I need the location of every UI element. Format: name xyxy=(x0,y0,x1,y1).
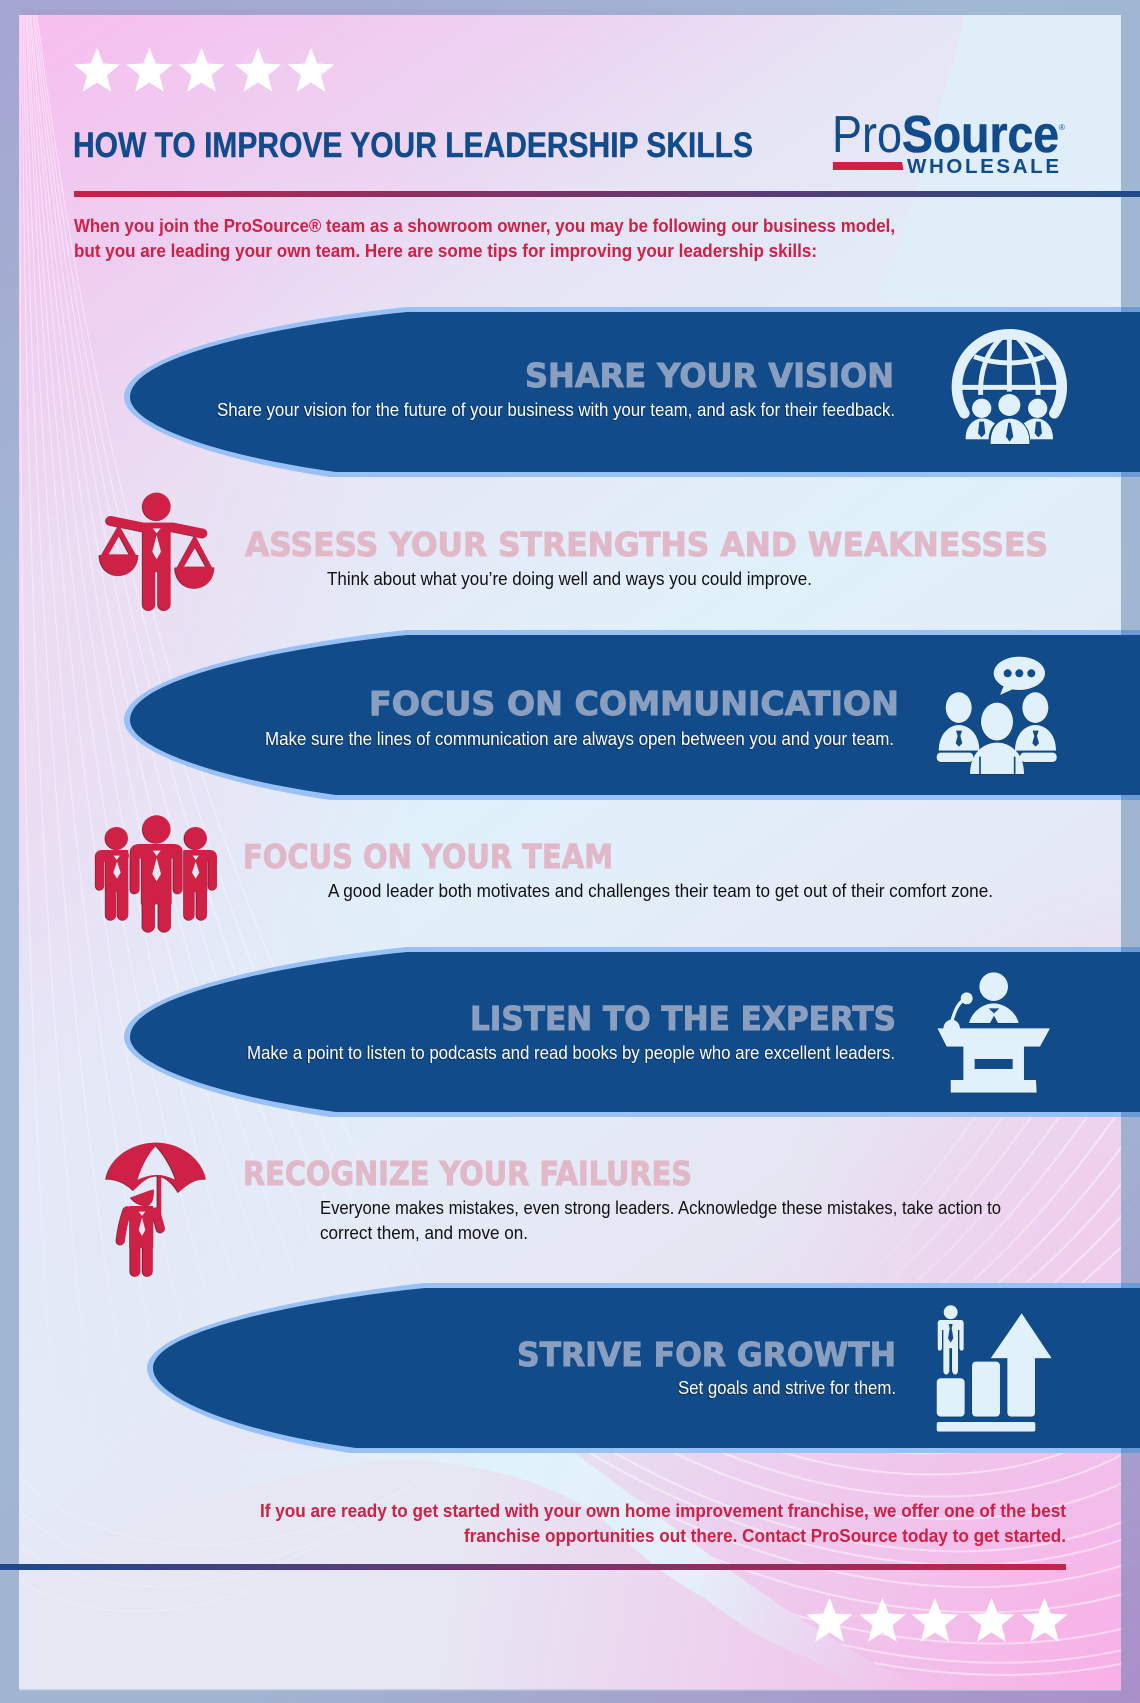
stars bottom xyxy=(806,1598,1068,1642)
logo: ProSource Wholesale: WHOLESALE xyxy=(907,155,1059,178)
closing text: franchise opportunities out there. Contact ProSource today to get started. xyxy=(464,1525,1066,1546)
heading: ASSESS YOUR STRENGTHS AND WEAKNESSES xyxy=(245,525,1048,564)
description: Set goals and strive for them. xyxy=(678,1377,896,1398)
description: Everyone makes mistakes, even strong leaders. Acknowledge these mistakes, take action to xyxy=(320,1197,1001,1218)
description: Make sure the lines of communication are always open between you and your team. xyxy=(265,728,894,749)
icon: person on rising bars with arrow xyxy=(937,1305,1052,1432)
description: Think about what you’re doing well and ways you could improve. xyxy=(327,568,812,589)
heading: FOCUS ON YOUR TEAM xyxy=(243,837,613,876)
description: A good leader both motivates and challenges their team to get out of their comfort zone. xyxy=(328,880,993,901)
closing text xyxy=(260,1500,1066,1546)
icon: globe with people xyxy=(957,334,1062,444)
logo: ProSource Wholesale: ® xyxy=(1059,123,1065,132)
heading: SHARE YOUR VISION xyxy=(525,356,894,395)
logo: ProSource Wholesale xyxy=(832,106,1065,178)
description line 2: correct them, and move on. xyxy=(320,1222,528,1243)
panel: listen to the experts xyxy=(124,947,1140,1117)
intro text: but you are leading your own team. Here are some tips for improving your leadership skills: xyxy=(74,240,817,261)
panel: share your vision xyxy=(124,307,1140,477)
heading: RECOGNIZE YOUR FAILURES xyxy=(243,1154,692,1193)
title: HOW TO IMPROVE YOUR LEADERSHIP SKILLS xyxy=(73,126,753,165)
heading: STRIVE FOR GROWTH xyxy=(517,1335,896,1374)
icon: man with umbrella xyxy=(106,1143,206,1271)
item: focus on your team xyxy=(96,815,993,926)
heading: FOCUS ON COMMUNICATION xyxy=(369,684,899,723)
panel: focus on communication xyxy=(124,630,1140,800)
item: assess your strengths and weaknesses xyxy=(99,493,1048,604)
icon: man with scales xyxy=(99,493,214,604)
heading: LISTEN TO THE EXPERTS xyxy=(470,999,896,1038)
icon: speaker at podium xyxy=(937,972,1050,1093)
panel: strive for growth xyxy=(147,1283,1140,1453)
description: Share your vision for the future of your business with your team, and ask for their feedback. xyxy=(217,399,895,420)
logo: ProSource Wholesale: Source xyxy=(902,106,1059,164)
stars top xyxy=(74,48,334,92)
intro text: When you join the ProSource® team as a showroom owner, you may be following our business model, xyxy=(74,215,895,236)
description: Make a point to listen to podcasts and read books by people who are excellent leaders. xyxy=(247,1042,895,1063)
icon: team conversation xyxy=(937,657,1057,774)
closing text: If you are ready to get started with your own home improvement franchise, we offer one of the best xyxy=(260,1500,1066,1521)
logo: ProSource Wholesale: Pro xyxy=(832,106,902,164)
intro text xyxy=(74,215,895,261)
item: recognize your failures xyxy=(106,1143,1001,1271)
bottom rule xyxy=(0,1564,1066,1570)
top rule xyxy=(74,191,1140,197)
icon: three business people xyxy=(96,815,217,926)
